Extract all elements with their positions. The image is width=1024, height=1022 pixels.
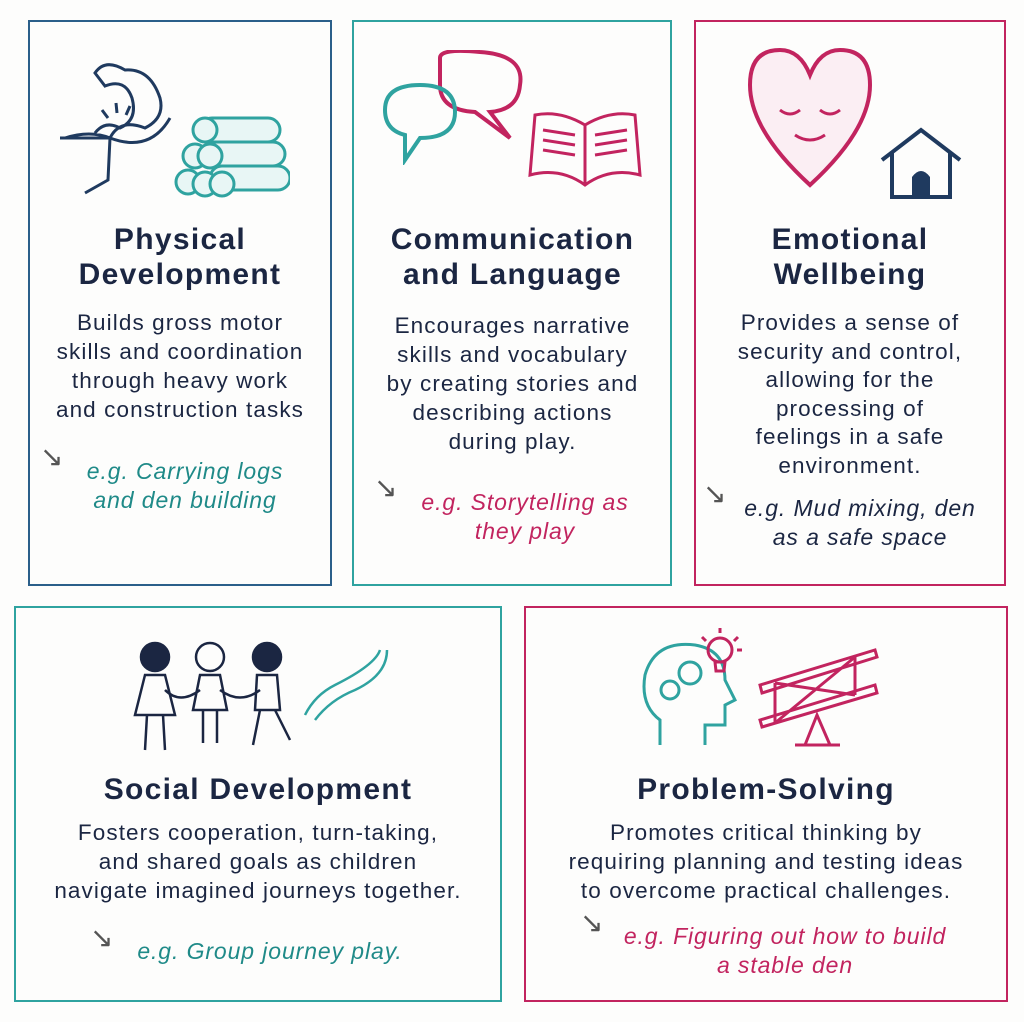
title: problem-solving: Problem-Solving: [637, 773, 895, 806]
text: communication: during play.: [449, 429, 576, 454]
text: physical: skills and coordination: [57, 339, 303, 364]
text: emotional: processing of: [776, 396, 924, 420]
text: physical: Builds gross motor: [77, 310, 283, 335]
title: physical development: Physical: [114, 223, 246, 256]
title: communication: Communication: [391, 223, 634, 256]
text: communication: Encourages narrative: [395, 313, 630, 338]
example: communication: e.g. Storytelling as: [421, 489, 629, 515]
text: communication: describing actions: [413, 400, 612, 425]
example: problem-solving: a stable den: [717, 952, 853, 978]
title: emotional: [772, 223, 928, 291]
example: communication: they play: [475, 518, 575, 544]
icon: open book: [528, 112, 642, 187]
panel: emotional wellbeing: [694, 20, 1006, 586]
arrow: ↘: [40, 441, 63, 472]
text: emotional: security and control,: [738, 338, 962, 364]
text: physical: through heavy work: [72, 368, 288, 393]
example: social: e.g. Group journey play.: [137, 938, 403, 964]
text: emotional: [738, 310, 962, 478]
text: problem-solving: requiring planning and testing ideas: [569, 849, 963, 874]
icon: seesaw frame: [758, 648, 879, 746]
title: emotional: Emotional: [772, 223, 928, 256]
example: problem-solving: e.g. Figuring out how to build: [624, 923, 946, 949]
icon: house: [880, 128, 962, 199]
example: physical: e.g. Carrying logs: [87, 458, 283, 484]
example: problem-solving: [624, 923, 946, 978]
icon: head with gears and bulb: [642, 628, 742, 745]
example: emotional: [744, 495, 976, 550]
text: social: [54, 820, 462, 903]
title: physical development: Development: [79, 258, 281, 291]
text: communication: by creating stories and: [387, 371, 638, 396]
title: emotional: Wellbeing: [774, 258, 926, 291]
example: physical: [87, 458, 283, 513]
text: communication: [387, 313, 638, 454]
text: problem-solving: to overcome practical challenges.: [581, 878, 951, 903]
text: emotional: Provides a sense of: [741, 310, 959, 335]
example: emotional: e.g. Mud mixing, den: [744, 495, 976, 521]
example: physical: and den building: [93, 487, 277, 513]
panel: communication and language: [352, 20, 672, 586]
icon: smiling heart: [748, 48, 872, 188]
title: physical development: [79, 223, 281, 291]
text: physical: [56, 310, 304, 422]
arrow: ↘: [703, 478, 726, 509]
icon: speech bubbles: [383, 50, 522, 165]
text: problem-solving: [569, 820, 963, 903]
example: communication: [421, 489, 629, 544]
example: emotional: as a safe space: [773, 524, 947, 550]
text: social: navigate imagined journeys together.: [54, 878, 462, 903]
icon: flexed arm: [60, 63, 172, 194]
text: social: Fosters cooperation, turn-taking,: [78, 820, 438, 845]
text: emotional: allowing for the: [766, 367, 934, 392]
panel: social development: [14, 606, 502, 1002]
text: social: and shared goals as children: [99, 849, 417, 874]
arrow: ↘: [580, 907, 603, 938]
icon: logs: [174, 116, 290, 198]
title: communication: [391, 223, 634, 291]
icon: children holding hands: [133, 642, 388, 750]
panel: problem-solving: [524, 606, 1008, 1002]
text: communication: skills and vocabulary: [397, 342, 628, 367]
arrow: ↘: [374, 472, 397, 503]
text: emotional: environment.: [778, 452, 922, 478]
panel: physical development: [28, 20, 332, 586]
title: communication: and Language: [403, 258, 622, 291]
arrow: ↘: [90, 922, 113, 953]
title: social: Social Development: [104, 773, 412, 806]
text: problem-solving: Promotes critical thinking by: [610, 820, 922, 845]
text: emotional: feelings in a safe: [756, 424, 944, 449]
text: physical: and construction tasks: [56, 397, 304, 422]
